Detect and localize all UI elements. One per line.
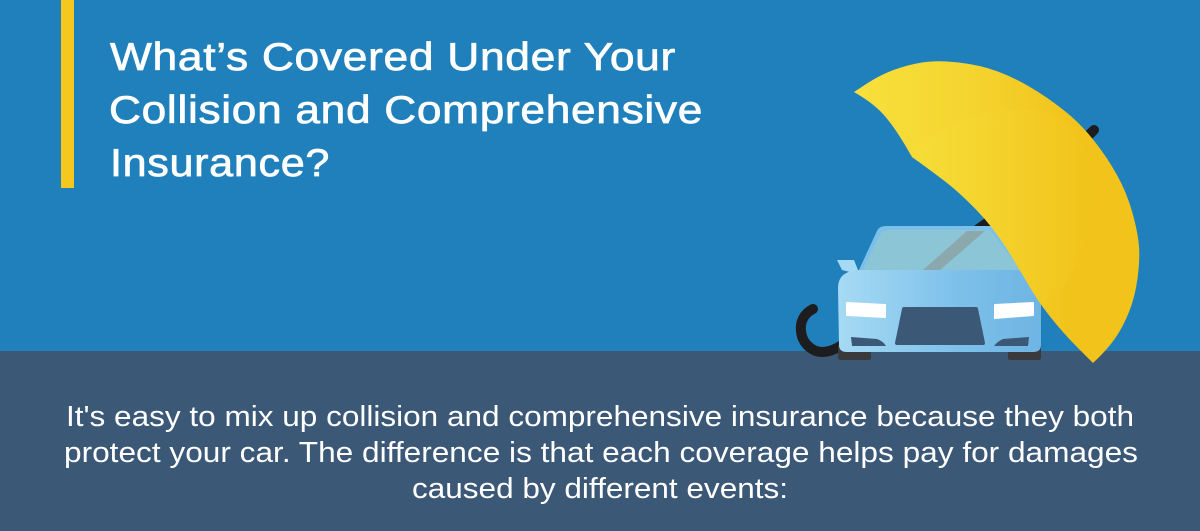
grille: [897, 309, 983, 343]
title: What’s Covered Under Your: [110, 36, 676, 79]
illustration: car under umbrella: [801, 61, 1139, 363]
lower vents: [851, 337, 1029, 346]
windshield reflection: [923, 231, 985, 270]
roof: [858, 226, 1026, 272]
windshield: [863, 230, 1020, 270]
icon: umbrella canopy: [854, 61, 1139, 363]
icon: car: [837, 226, 1041, 360]
icon: umbrella handle: [801, 309, 842, 352]
title accent bar: [61, 0, 74, 188]
background sky: [0, 0, 1200, 351]
intro paragraph: It's easy to mix up collision and comprehensive insurance because they both: [66, 401, 1134, 433]
title: [109, 36, 703, 185]
title: Insurance?: [110, 142, 330, 185]
body: [838, 270, 1041, 352]
title: Collision and Comprehensive: [109, 89, 703, 132]
headlights: [847, 303, 1033, 318]
intro paragraph: caused by different events:: [412, 473, 788, 505]
icon: umbrella shaft and tip: [974, 130, 1094, 228]
intro paragraph: protect your car. The difference is that each coverage helps pay for damages: [64, 437, 1138, 469]
canopy inner panel: [912, 110, 1097, 303]
mirror: [837, 260, 858, 272]
intro paragraph: [64, 401, 1138, 505]
lower band: [0, 351, 1200, 531]
wheels: [838, 345, 1041, 360]
